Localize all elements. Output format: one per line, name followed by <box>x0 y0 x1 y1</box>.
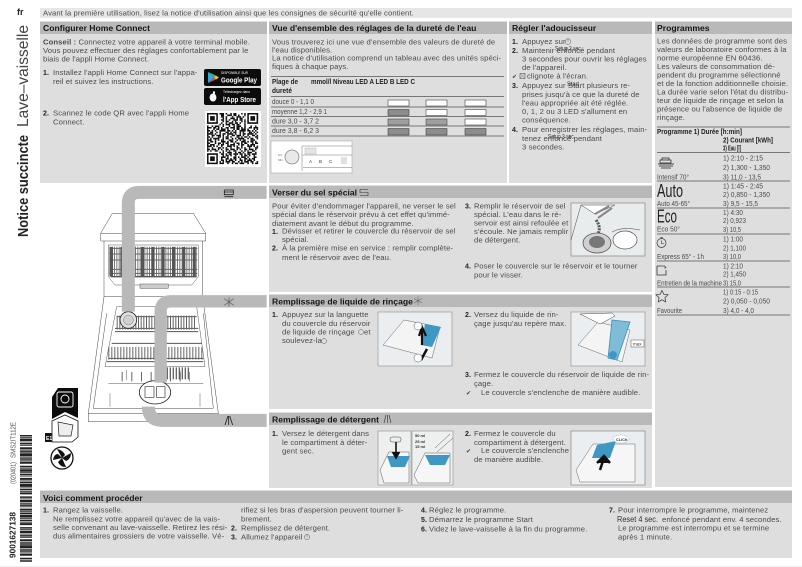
barcode <box>8 435 26 562</box>
step 7: enfoncé pendant env. 4 secondes. <box>662 515 782 524</box>
step 7: après 1 minute. <box>618 532 672 542</box>
row: Entretien: 2) 1,450 <box>723 270 746 278</box>
detergent step 2: Le couvercle s'enclenche <box>481 446 569 455</box>
detergent step 1: 1. <box>272 431 278 438</box>
badge: Google Play <box>204 69 261 86</box>
LED indicators <box>388 100 486 135</box>
icon: spray fan <box>51 447 73 469</box>
table: programmes: 2) Courant [kWh] <box>723 136 773 144</box>
model number: SMS2IT112E <box>10 422 18 458</box>
badge: Google Play: Google Play <box>221 76 257 84</box>
detergent step 2: ✔ <box>466 449 471 455</box>
panel: Remplissage de liquide de rinçage <box>269 294 652 409</box>
icon: rinse aid <box>414 296 422 305</box>
panel: Régler l'adoucisseur <box>509 21 652 183</box>
icon: E1 label: E1 <box>46 436 52 442</box>
table: water hardness: Plage de <box>272 77 298 86</box>
row: Favourite <box>656 288 770 315</box>
worktop <box>101 213 206 241</box>
text block: programme data: teur de liquide de rinçage et selon la <box>657 96 784 105</box>
ribbon symbols <box>224 190 234 425</box>
text block: programme data: Les données de programme sont des <box>657 36 787 46</box>
panel: Verser du sel spécial <box>269 185 652 292</box>
salt instructions right: 4. <box>465 264 471 270</box>
detergent step 2: compartiment à détergent. <box>474 438 566 447</box>
row: Eco <box>657 206 746 234</box>
row: Intensif: 1) 2:10 - 2:15 <box>723 154 763 162</box>
icon group: machine features <box>45 388 78 469</box>
icon: detergent <box>384 415 391 423</box>
softener steps: 3 secondes pour ouvrir les réglages <box>522 54 647 64</box>
top notice bar: Avant la première utilisation, lisez la notice d'utilisation ainsi que les consignes de sécurité qu'elle contient. <box>43 8 414 18</box>
softener steps: Appuyez sur Start plusieurs re- <box>522 81 630 90</box>
icon: rinse aid dispenser label <box>52 388 78 442</box>
row: Entretien <box>657 262 746 288</box>
salt instructions right: de détergent. <box>474 236 520 244</box>
steps 4 to 6 <box>421 506 587 534</box>
row: Entretien: 1) 2:10 <box>723 262 743 270</box>
salt instructions right: spécial. L'eau dans le ré- <box>474 210 562 219</box>
softener steps: l'eau appropriée ait été réglée. <box>522 98 628 108</box>
salt instructions right: Poser le couvercle sur le réservoir et le tourner <box>474 262 638 270</box>
steps 1 continued, 2, 3 <box>231 506 404 542</box>
table: water hardness: dure 3,8 - 6,2 3 <box>272 126 319 135</box>
rinse step 1 <box>272 310 371 345</box>
batch code: (020401) <box>10 462 18 484</box>
row: Eco: Eco <box>657 206 677 226</box>
salt instructions left: Pour éviter d'endommager l'appareil, ne verser le sel <box>272 202 456 210</box>
step 7: Le programme est interrompu et se termine <box>618 524 769 532</box>
illustration: dosage levels: 15 ml <box>415 444 425 449</box>
rinse step 3: çage. <box>474 379 493 388</box>
heading: procéder: Voici comment procéder <box>43 493 143 503</box>
steps 4 to 6: Démarrez le programme Start <box>429 515 534 524</box>
rinse step 1: soulevez-la <box>282 336 322 345</box>
table: programmes <box>656 127 790 315</box>
row: Express: 3) 10,0 <box>723 252 741 261</box>
text block: intro dureté: l'eau disponibles. <box>272 46 332 54</box>
row: Express: 2) 1,100 <box>723 244 746 252</box>
softener steps: Pour enregistrer les réglages, main- <box>522 125 648 134</box>
row: Auto: 3) 9,5 - 15,5 <box>723 199 758 208</box>
row: Auto: Auto 45-65° <box>657 199 690 208</box>
steps 1: Rangez la vaisselle. <box>53 506 123 514</box>
side title: Lave-vaisselle: Lave–vaisselle <box>15 25 32 127</box>
salt instructions right <box>465 202 638 280</box>
steps 1 continued, 2, 3: brement. <box>241 514 272 524</box>
panel: Vue d'ensemble des réglages de la dureté de l'eau <box>269 21 507 183</box>
illustration: filling rinse aid: max <box>633 342 642 346</box>
row: Intensif <box>657 154 770 182</box>
detergent step 1: Versez le détergent dans <box>282 429 369 438</box>
text block: intro dureté <box>272 38 502 71</box>
heading: dureté de l'eau: Vue d'ensemble des réglages de la dureté de l'eau <box>272 23 476 33</box>
salt instructions left: diatement avant le début du programme. <box>272 219 414 228</box>
row: Favourite: 1) 0:15 - 0:15 <box>723 288 758 296</box>
row: Eco: 3) 10,5 <box>723 225 741 234</box>
step 7: 7. <box>609 508 615 514</box>
rinse step 3: 3. <box>465 372 471 379</box>
step 1 <box>43 68 198 86</box>
rinse step 1: du couvercle du réservoir <box>282 319 371 328</box>
table: water hardness: moyenne 1,2 - 2,9 1 <box>272 107 327 116</box>
softener steps: Maintenir enfoncé pendant <box>522 46 616 55</box>
steps 4 to 6: 4. <box>421 508 427 514</box>
panel: Configurer Home Connect <box>40 21 267 183</box>
rinse step 3 <box>465 370 650 397</box>
salt instructions right: servoir est ainsi refoulée et <box>474 218 569 228</box>
badge: App Store <box>204 88 261 105</box>
softener steps: Setup 3 sec. <box>548 134 575 140</box>
illustration: closing compartment: CLICK <box>616 438 628 442</box>
steps 1: Ne remplissez votre appareil qu'avec de la vais- <box>53 514 220 524</box>
panel: Programmes <box>655 21 792 487</box>
softener steps: clignote à l'écran. <box>527 72 588 80</box>
steps 1 continued, 2, 3: 3. <box>231 534 237 542</box>
salt instructions left: À la première mise en service : remplir complète- <box>282 244 453 252</box>
row: Entretien: 3) 15,0 <box>723 278 741 288</box>
illustration: closing compartment <box>571 431 645 485</box>
row: Eco: 2) 0,923 <box>723 216 746 225</box>
heading: Programmes: Programmes <box>657 23 710 33</box>
salt instructions left: spécial dans le réservoir prévu à cet effet qu'immé- <box>272 210 450 219</box>
softener steps: 2. <box>512 48 518 55</box>
text block: programme data <box>657 36 789 122</box>
softener steps: Start <box>567 81 579 88</box>
text block: programme data: valeurs de laboratoire conformes à la <box>657 45 787 54</box>
salt instructions right: Remplir le réservoir de sel <box>474 202 566 210</box>
rinse step 1: Appuyez sur la languette <box>282 310 369 319</box>
text block: programme data: rinçage. <box>657 113 685 122</box>
control panel inset: C <box>329 159 333 164</box>
rinse step 1: 1. <box>272 312 278 319</box>
step 2: Scannez le code QR avec l'appli Home <box>53 108 189 118</box>
badge: App Store: Téléchargez dans <box>223 90 250 94</box>
steps 1 continued, 2, 3: rifiez si les bras d'aspersion peuvent tourner li- <box>241 506 404 514</box>
detergent step 2: de manière audible. <box>474 455 543 464</box>
text block: conseil: Vous pouvez effectuer des réglages confortablement par le <box>43 46 248 55</box>
detergent step 2: Fermez le couvercle du <box>474 429 556 438</box>
heading: sel spécial: Verser du sel spécial <box>272 188 357 198</box>
text block: conseil: biais de l'appli Home Connect. <box>43 54 149 64</box>
row: Favourite: 2) 0,050 - 0,050 <box>723 296 770 306</box>
text block: programme data: La durée varie selon l'état du distribu- <box>657 88 789 96</box>
control panel inset: Min <box>278 158 283 162</box>
table: water hardness <box>271 76 504 136</box>
heading: liquide de rinçage: Remplissage de liquide de rinçage <box>272 296 413 306</box>
text block: intro dureté: fiques à chaque pays. <box>272 62 349 71</box>
row: Favourite: 3) 4,0 - 4,0 <box>723 306 754 315</box>
steps 1: dus alimentaires grossiers de votre vaisselle. Vé- <box>53 532 225 540</box>
text block: programme data: Les valeurs de consommation dé- <box>657 62 775 71</box>
softener steps: Appuyez sur <box>522 37 566 46</box>
steps 1 continued, 2, 3: Remplissez de détergent. <box>241 524 330 532</box>
top notice bar <box>40 8 792 18</box>
softener steps: 3. <box>512 83 518 90</box>
cabinet and door <box>88 241 218 422</box>
text block: intro dureté: Vous trouverez ici une vue d'ensemble des valeurs de dureté de <box>272 38 495 46</box>
row: Eco: Eco 50° <box>657 224 680 234</box>
table: water hardness: dureté <box>272 86 292 95</box>
control panel inset: B <box>319 159 322 164</box>
steps 1 <box>43 506 228 540</box>
badge: Google Play: DISPONIBLE SUR <box>221 71 249 75</box>
table: programmes: Programme 1) Durée [h:min] <box>657 127 742 136</box>
text block: programme data: norme européenne EN 60436. <box>657 54 763 62</box>
illustration: salt reservoir <box>571 203 645 256</box>
rinse step 3: Le couvercle s'enclenche de manière audible. <box>481 388 640 397</box>
step 2 <box>43 108 189 126</box>
detergent step 1: gent sec. <box>282 446 314 456</box>
steps 4 to 6: 5. <box>421 517 427 524</box>
salt instructions left <box>272 202 456 262</box>
upper rack <box>108 245 198 288</box>
illustration: filling rinse aid <box>571 312 645 366</box>
salt instructions right: s'écoule. Ne jamais remplir <box>474 227 569 236</box>
table: programmes: 3) Eau [l] <box>723 144 741 152</box>
step 1: Installez l'appli Home Connect sur l'appa- <box>53 68 198 77</box>
panel: Voici comment procéder <box>40 490 792 558</box>
control panel inset: CC <box>278 153 283 157</box>
lower rack <box>105 307 205 407</box>
softener steps: conséquence. <box>522 116 571 124</box>
steps 4 to 6: Videz le lave-vaisselle à la fin du programme. <box>429 524 587 534</box>
dispenser circle <box>139 381 171 404</box>
salt reservoir circle <box>120 312 137 328</box>
row: Auto: 1) 1:45 - 2:45 <box>723 182 763 190</box>
row: Entretien: Entretien de la machine <box>657 278 722 288</box>
text block: programme data: pendent du programme sélectionné <box>657 70 781 80</box>
illustration: opening rinse lid <box>378 312 452 366</box>
steps 1: selle convenant au lave-vaisselle. Retirez les rési- <box>53 523 228 532</box>
softener steps: prises jusqu'à ce que la dureté de <box>522 90 640 99</box>
softener steps: 3 secondes. <box>522 142 564 152</box>
salt instructions right: pour le visser. <box>474 270 523 280</box>
language code: fr <box>17 7 24 17</box>
salt instructions left: 2. <box>272 246 278 252</box>
softener steps: 1. <box>512 39 518 46</box>
table: water hardness: dure 3,0 - 3,7 2 <box>272 116 319 126</box>
text block: intro dureté: La notice d'utilisation comprend un tableau avec des unités spéci- <box>272 54 502 62</box>
badge: App Store: l'App Store <box>223 95 256 104</box>
panel: Remplissage de détergent <box>269 412 652 488</box>
row: Auto: 2) 0,850 - 1,350 <box>723 190 770 199</box>
salt instructions left: spécial. <box>282 235 309 244</box>
row: Auto: Auto <box>657 181 683 201</box>
barcode number: 9001627138 <box>8 511 18 558</box>
rinse step 2: Versez du liquide de rin- <box>474 310 559 319</box>
step 2: Connect. <box>53 118 84 126</box>
row: Express: Express 65° - 1h <box>657 252 704 261</box>
rinse step 3: Fermez le couvercle du réservoir de liquide de rin- <box>474 370 650 379</box>
step 7: Pour interrompre le programme, maintenez <box>618 506 768 514</box>
rinse step 1: et <box>364 328 371 336</box>
row: Entretien: * <box>664 266 667 273</box>
softener steps <box>512 37 648 152</box>
salt instructions left: ment le réservoir avec de l'eau. <box>282 253 391 262</box>
salt instructions left: Dévisser et retirer le couvercle du réservoir de sel <box>282 226 456 236</box>
step 7: Reset 4 sec. <box>617 514 658 524</box>
steps 1 continued, 2, 3: 2. <box>231 526 237 532</box>
salt instructions right: 3. <box>465 204 471 210</box>
row: Intensif: Intensif 70° <box>657 172 689 182</box>
illustration: pouring tablet <box>378 431 411 485</box>
heading: Configurer Home Connect: Configurer Home Connect <box>43 23 150 33</box>
softener steps: ✔ <box>512 74 517 80</box>
heading: détergent: Remplissage de détergent <box>272 414 379 424</box>
QR code <box>205 111 261 167</box>
detergent step 2 <box>465 429 569 464</box>
row: Intensif: 2) 1,300 - 1,350 <box>723 163 770 172</box>
step 1: 1. <box>43 70 49 77</box>
callout ribbons <box>128 192 267 420</box>
illustration: dosage levels <box>412 431 453 485</box>
detergent step 1: le compartiment à déter- <box>282 438 368 447</box>
row: Express <box>657 234 746 261</box>
dishwasher illustration <box>88 190 267 425</box>
detergent step 1 <box>272 429 369 456</box>
steps 1 continued, 2, 3: Allumez l'appareil <box>241 532 303 542</box>
control panel inset: A <box>309 159 312 164</box>
heading: adoucisseur: Régler l'adoucisseur <box>512 23 597 33</box>
text block: conseil: Conseil : Connectez votre appareil à votre terminal mobile. <box>43 38 250 46</box>
icon: salt <box>360 190 368 196</box>
step 7 <box>609 506 782 542</box>
detergent step 2: 2. <box>465 431 471 438</box>
rinse step 2: 2. <box>465 312 471 319</box>
softener steps: tenez enfoncé pendant <box>522 134 603 143</box>
steps 4 to 6: Réglez le programme. <box>429 506 506 514</box>
step 2: 2. <box>43 110 49 118</box>
salt instructions left: 1. <box>272 229 278 236</box>
rinse step 1: de liquide de rinçage <box>282 328 355 336</box>
control panel inset <box>271 141 352 173</box>
softener steps: Setup 3 sec. <box>555 46 582 52</box>
softener steps: 4. <box>512 127 518 134</box>
table: water hardness: mmol/l Niveau LED A LED B LED C <box>311 77 415 86</box>
table: water hardness: douce 0 - 1,1 0 <box>272 97 314 106</box>
text block: conseil <box>43 38 250 64</box>
row: Intensif: 3) 11,0 - 13,5 <box>723 172 761 182</box>
text block: programme data: et de la fonction additionnelle choisie. <box>657 79 788 88</box>
text block: programme data: présence ou l'absence de liquide de <box>657 104 782 114</box>
steps 1: 1. <box>43 508 49 514</box>
illustration: dosage levels: 25 ml <box>415 439 425 444</box>
softener steps: de l'appareil. <box>522 63 567 72</box>
steps 4 to 6: 6. <box>421 526 427 534</box>
rinse step 2 <box>465 310 566 328</box>
row: Express: 1) 1:00 <box>723 234 743 244</box>
rinse step 2: çage jusqu'au repère max. <box>474 319 566 328</box>
step 1: reil et suivez les instructions. <box>53 77 154 86</box>
row: Eco: 1) 4:30 <box>723 208 743 217</box>
rinse step 3: ✔ <box>466 391 471 397</box>
row: Favourite: Favourite <box>657 306 682 315</box>
row: Auto <box>657 181 770 208</box>
illustration: dosage levels: 50 ml <box>415 433 425 438</box>
side title: Notice succincte: Notice succincte <box>16 135 32 237</box>
softener steps: 0, 1, 2 ou 3 LED s'allument en <box>522 107 627 116</box>
